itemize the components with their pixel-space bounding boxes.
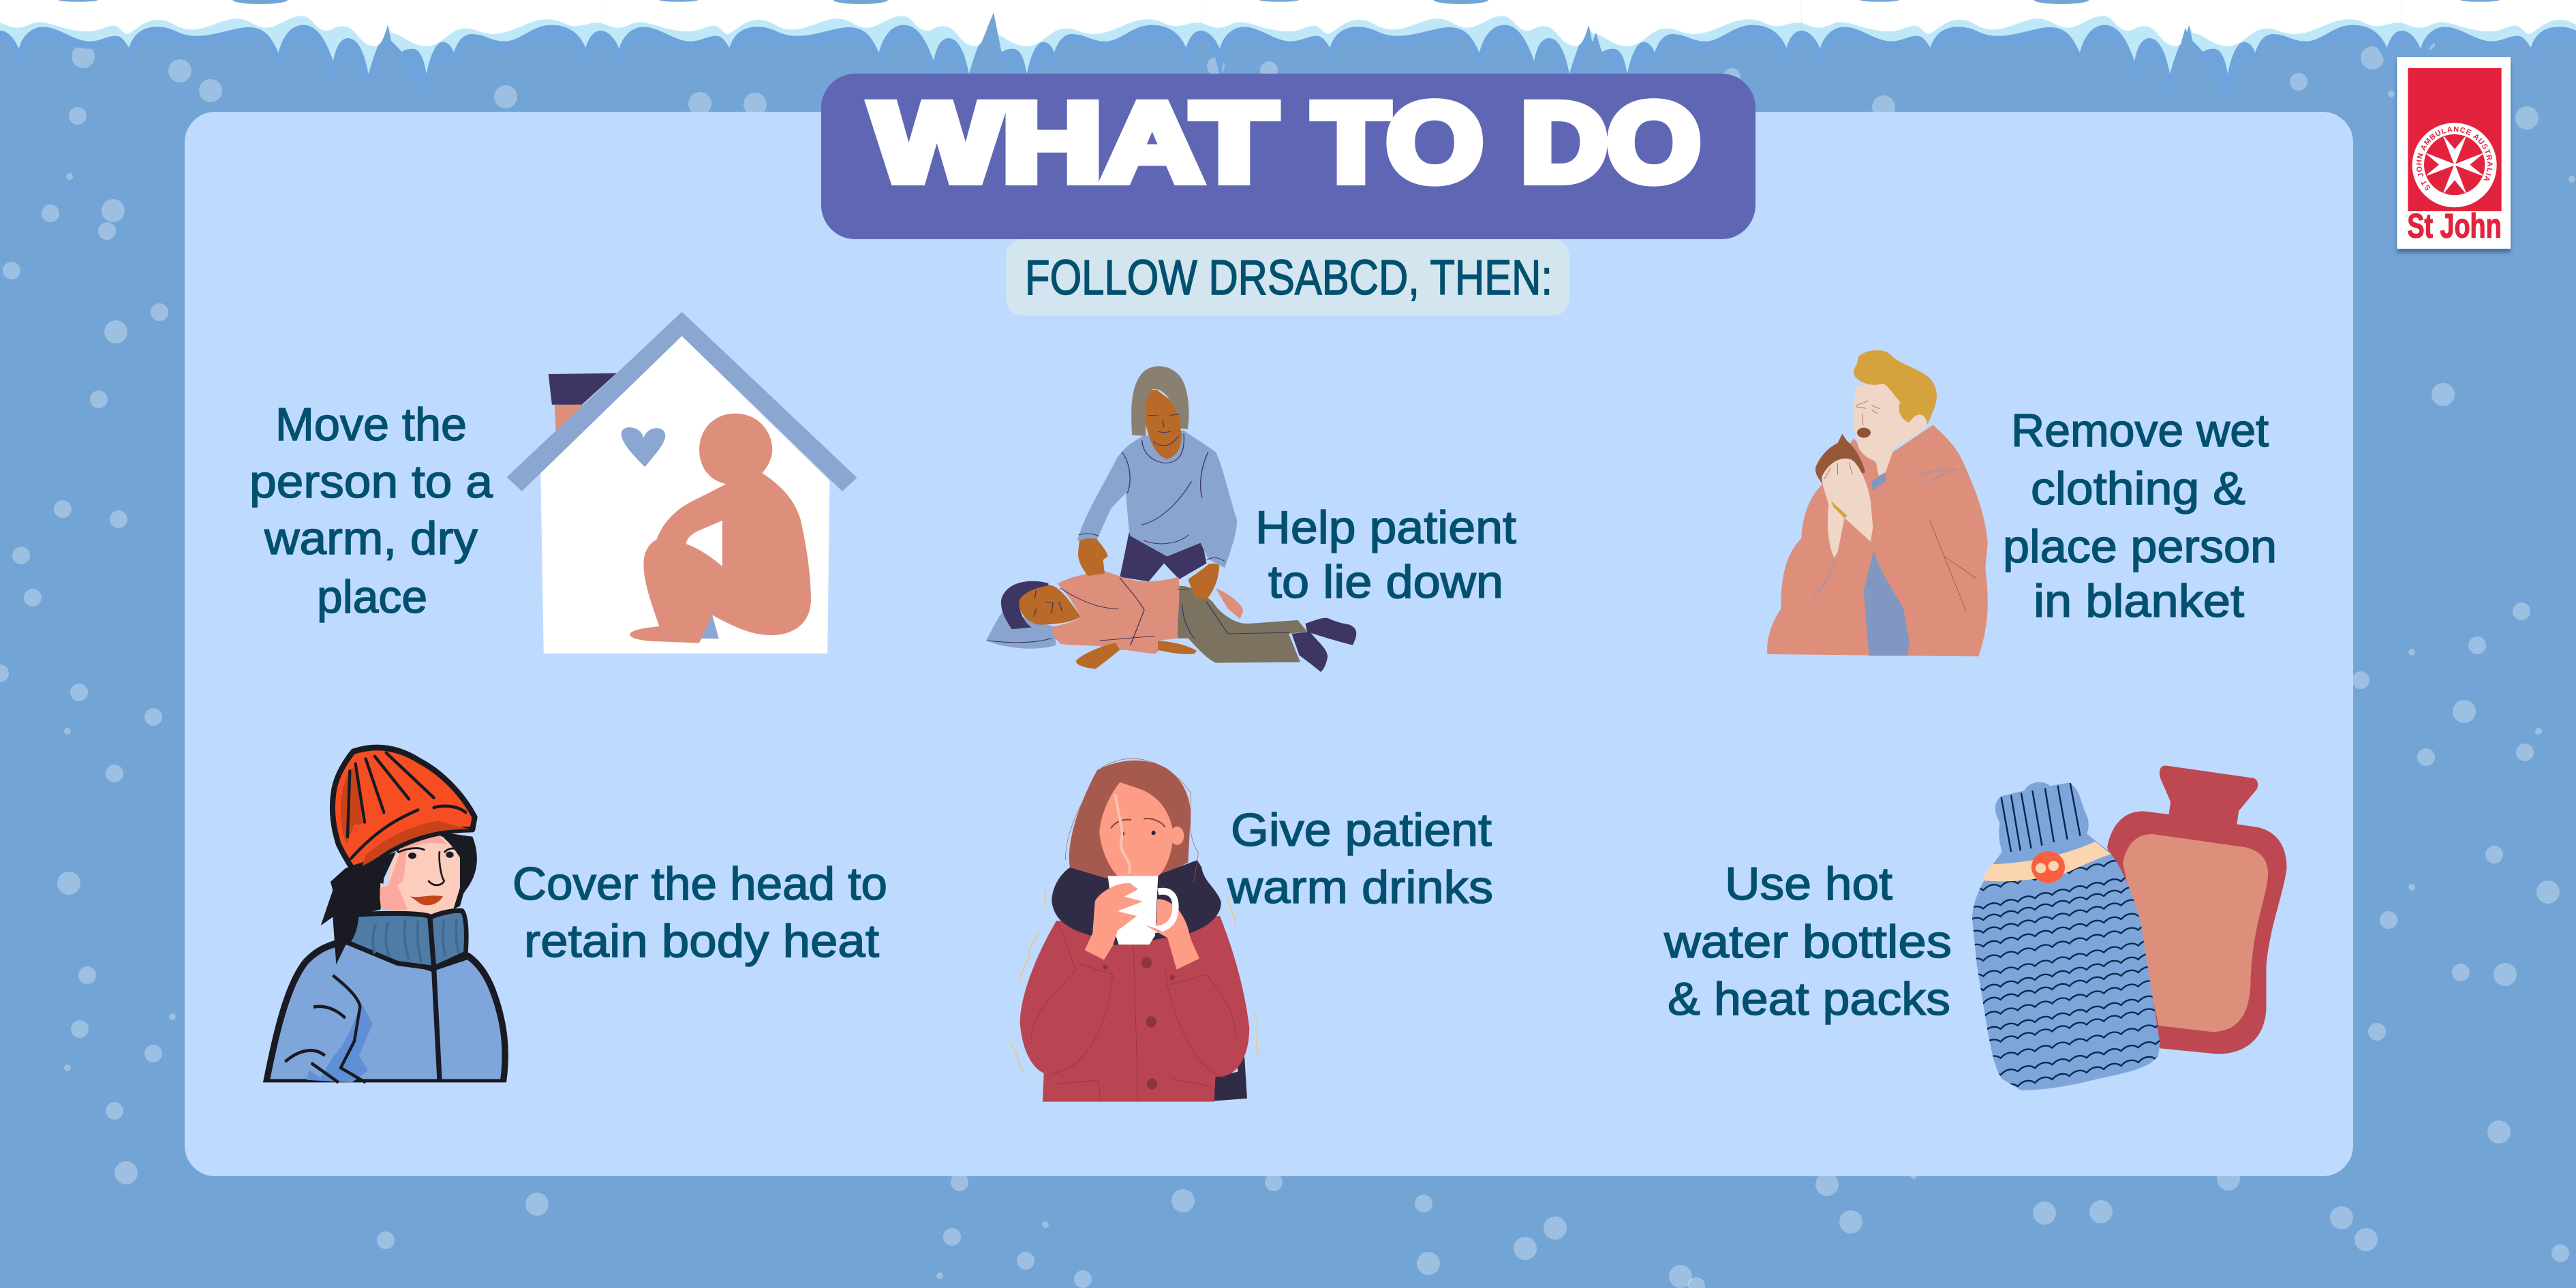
text: warm drinks: warm drinks <box>1227 861 1493 913</box>
icon: woman with warm mug <box>1009 758 1259 1102</box>
text: move to warm place: Move the <box>275 399 467 450</box>
text: hot water bottles: & heat packs <box>1668 973 1950 1025</box>
text: remove wet clothing: Remove wet <box>2011 405 2269 457</box>
text: help patient: Help patient <box>1255 502 1516 553</box>
icon: hot water bottles <box>1966 765 2286 1097</box>
title text: TO <box>1313 80 1483 204</box>
icon: helper and patient <box>986 366 1356 672</box>
logo: St John: St John <box>2407 207 2502 245</box>
icon: house with seated person <box>507 312 857 654</box>
text: help patient <box>1255 502 1516 608</box>
title text <box>872 80 1700 204</box>
text: remove wet clothing <box>2003 405 2277 627</box>
title pill <box>821 74 1755 239</box>
subtitle text: FOLLOW DRSABCD, THEN: <box>1025 251 1552 305</box>
text: move to warm place: warm, dry <box>264 512 478 564</box>
icon: person in blanket <box>1767 350 1988 656</box>
text: hot water bottles: water bottles <box>1663 916 1952 968</box>
text: move to warm place: person to a <box>249 456 493 508</box>
text: move to warm place <box>249 399 493 623</box>
panel: main card <box>185 112 2353 1176</box>
text: warm drinks: Give patient <box>1231 804 1492 856</box>
icicle border <box>0 0 2576 102</box>
logo: St John <box>2395 57 2513 255</box>
text: hot water bottles <box>1663 858 1952 1025</box>
icon: woman in red hat <box>259 748 513 1092</box>
subtitle pill <box>1006 239 1569 316</box>
text: remove wet clothing: in blanket <box>2034 575 2244 627</box>
text: cover the head: retain body heat <box>524 915 879 967</box>
text: warm drinks <box>1227 804 1493 913</box>
text: help patient: to lie down <box>1268 556 1503 608</box>
title text: DO <box>1521 80 1700 204</box>
text: remove wet clothing: place person <box>2003 521 2277 572</box>
text: remove wet clothing: clothing & <box>2031 463 2245 515</box>
text: move to warm place: place <box>317 571 427 623</box>
text: cover the head: Cover the head to <box>512 858 887 910</box>
title text: WHAT <box>872 80 1276 204</box>
text: cover the head <box>512 858 887 967</box>
text: hot water bottles: Use hot <box>1725 858 1892 910</box>
logo: St John: ST JOHN AMBULANCE AUSTRALIA <box>2417 127 2493 191</box>
